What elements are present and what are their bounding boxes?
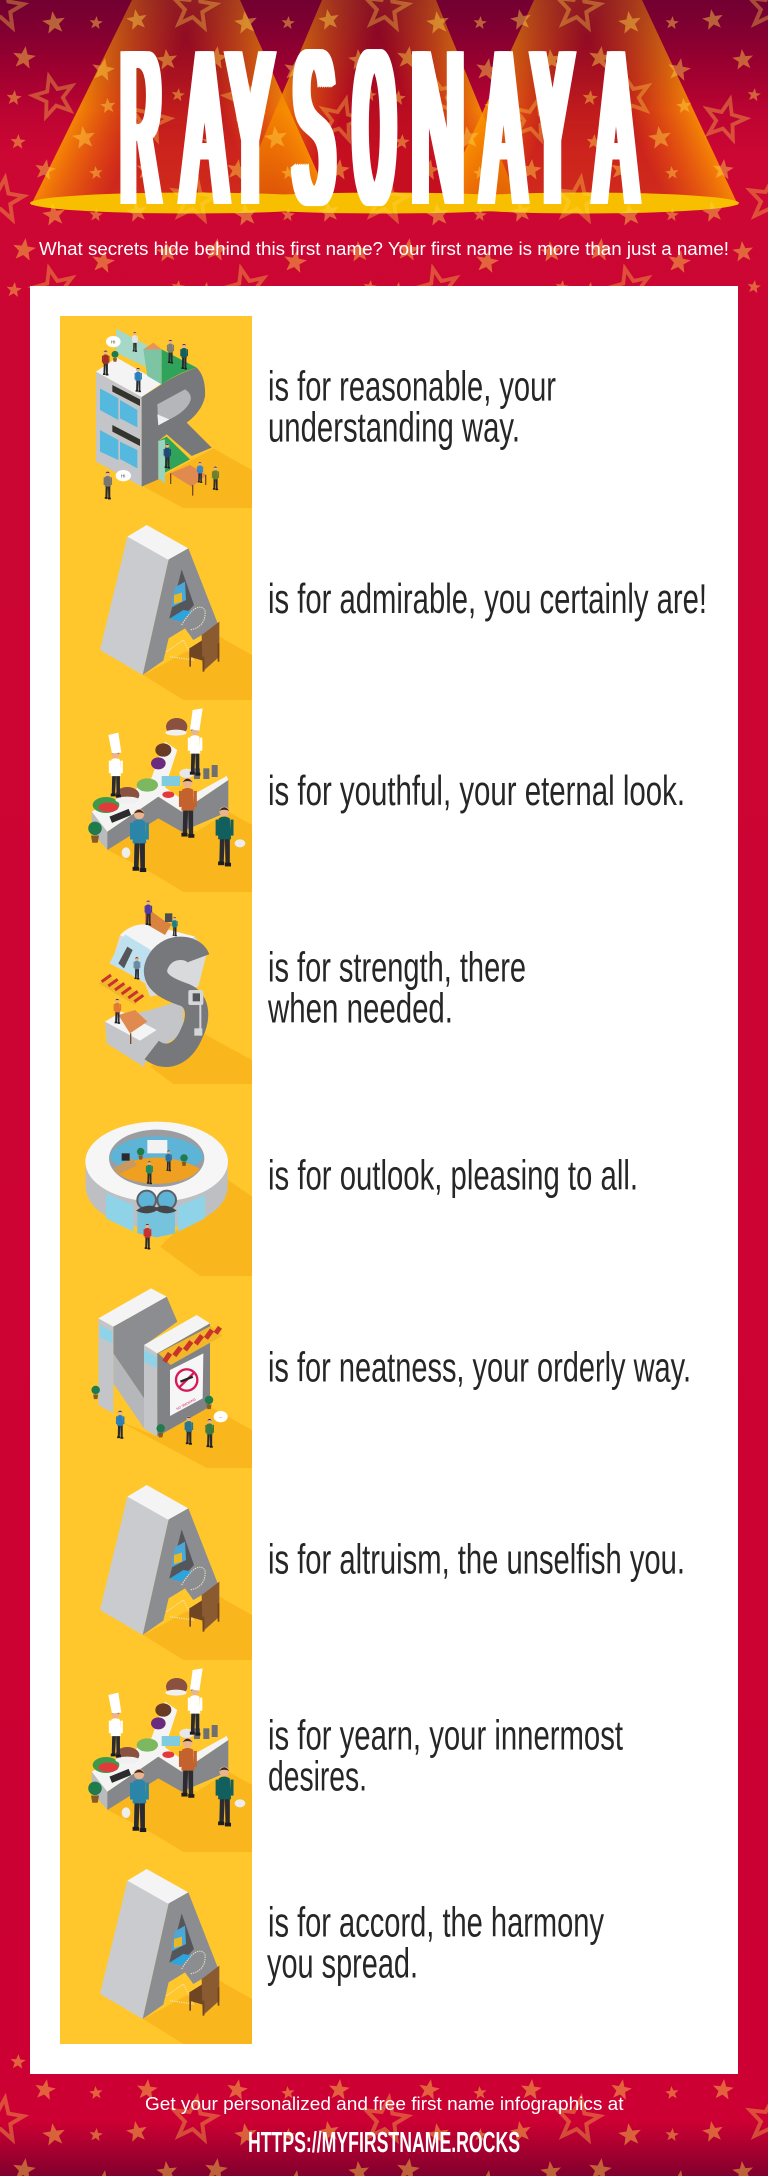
- text: S line: when needed.: [267, 985, 453, 1032]
- text: S line: [267, 944, 526, 1032]
- title: N: [406, 4, 459, 252]
- icon: letter R building: [96, 329, 252, 508]
- icon: letter O optician: [85, 1122, 252, 1276]
- footer prompt: Get your personalized and free first name infographics at: [145, 2094, 624, 2114]
- title: S: [288, 4, 327, 252]
- icon: letter A: [100, 525, 252, 700]
- text: Y line second: desires.: [268, 1753, 367, 1800]
- text: R line: is for reasonable, your: [268, 363, 556, 410]
- text: S line: is for strength, there: [268, 944, 526, 991]
- icon: letter Y second: [88, 1668, 252, 1852]
- title: [116, 4, 642, 252]
- text: A line third: you spread.: [267, 1940, 418, 1987]
- title: A: [477, 4, 518, 252]
- icon: letter R building: HI: [121, 473, 126, 478]
- title: Y: [222, 4, 266, 252]
- subtitle: What secrets hide behind this first name? Your first name is more than just a name!: [39, 239, 729, 259]
- icon: letter N building: ...: [219, 1414, 222, 1419]
- text: Y line second: is for yearn, your innermost: [268, 1711, 623, 1758]
- icon: letter A third: [100, 1869, 252, 2044]
- text: A line third: [267, 1899, 604, 1987]
- footer url: HTTPS://MYFIRSTNAME.ROCKS: [248, 2127, 520, 2159]
- title: R: [116, 4, 155, 252]
- text: R line: [268, 363, 556, 451]
- icon: letter N building: NO SMOKING: [176, 1397, 197, 1411]
- icon: letter A second: [100, 1485, 252, 1660]
- text: R line: understanding way.: [268, 404, 520, 451]
- text: A line third: is for accord, the harmony: [268, 1899, 604, 1946]
- title: Y: [527, 4, 566, 252]
- icon: letter N building: [91, 1288, 252, 1468]
- title: O: [349, 4, 386, 252]
- icon: letter S building: [98, 900, 252, 1084]
- icon: letter Y buffet: [88, 708, 252, 892]
- title: A: [177, 4, 220, 252]
- icon: letter R building: HI: [111, 339, 116, 344]
- title: A: [590, 4, 630, 252]
- text: Y line second: [268, 1711, 623, 1800]
